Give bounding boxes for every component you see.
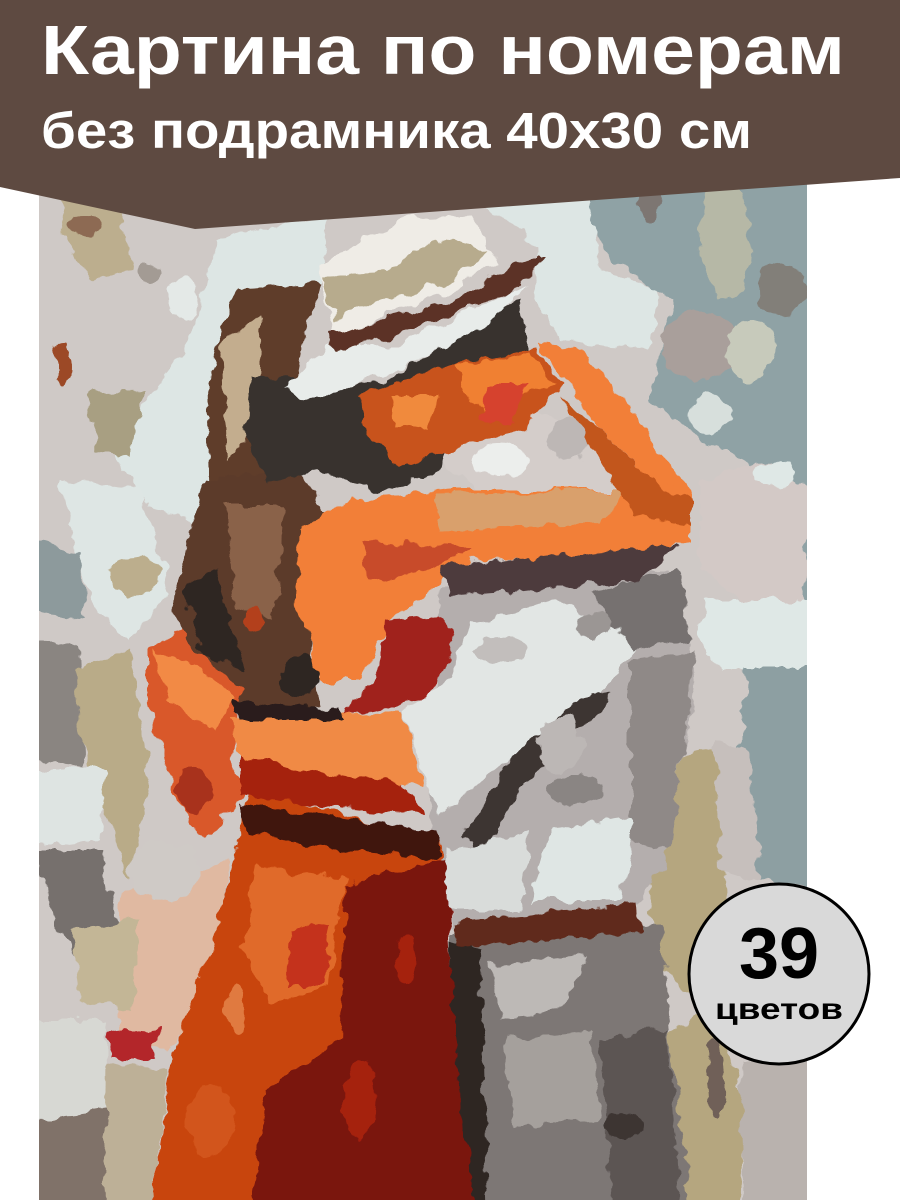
man's shirt [402,570,695,925]
badge number: 39 [739,914,819,994]
woman's back and raised arm [295,345,690,715]
man's trousers and belt [450,903,690,1200]
woman's hair [172,285,335,718]
red dress [150,790,475,1200]
painting: embracing couple [39,184,807,1200]
subtitle: без подрамника 40х30 см [41,102,752,159]
badge: 39 colours [689,884,869,1064]
painted background [39,184,807,1200]
badge label: цветов [715,993,843,1026]
title: Картина по номерам [41,11,845,89]
man's hat, hair and face [245,215,562,492]
woman's arm around the man [150,630,425,838]
header banner [0,0,900,229]
